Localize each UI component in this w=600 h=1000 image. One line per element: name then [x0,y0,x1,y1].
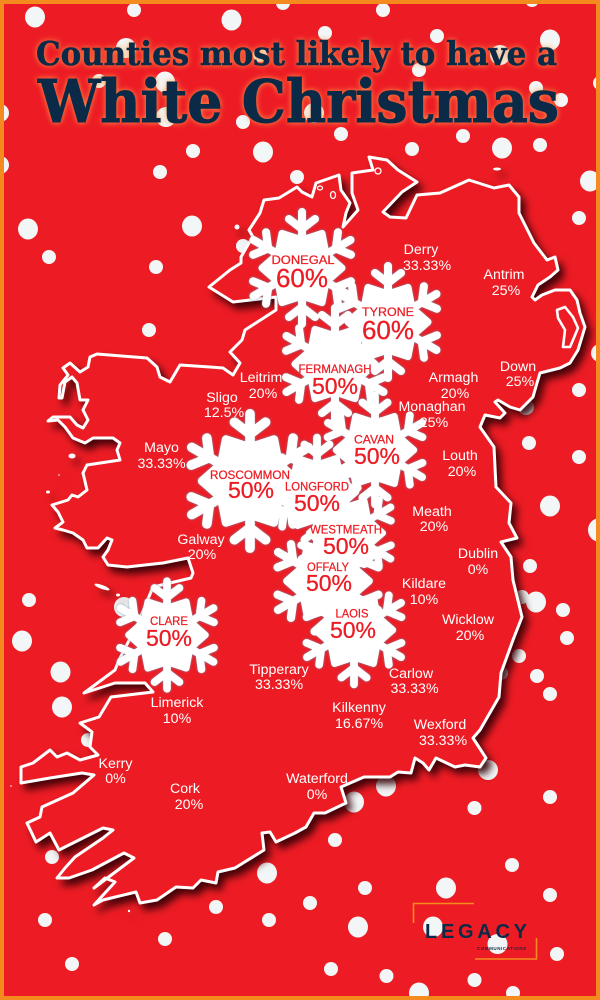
Tipperary: 33.33% [255,677,303,693]
Galway: Galway [177,532,225,548]
Offaly 50%: 50% [306,570,352,596]
snowflakes [114,212,443,689]
Tipperary: Tipperary [249,662,309,678]
Kilkenny: 16.67% [335,716,383,732]
Dublin: 0% [468,562,489,578]
Roscommon 50%: ROSCOMMON [210,468,290,482]
snowflake: Westmeath [295,481,397,585]
snowflake: Roscommon [184,414,316,548]
Kerry: 0% [105,771,126,787]
Armagh: 20% [441,386,470,402]
islands [10,168,501,912]
county percentage labels [99,242,536,813]
Mayo: Mayo [144,440,179,456]
Kilkenny: Kilkenny [332,700,386,716]
Carlow: Carlow [389,666,433,682]
Antrim: 25% [492,283,521,299]
snowflake: Longford [264,438,370,546]
Fermanagh 50%: FERMANAGH [298,362,372,376]
Kildare: Kildare [402,576,446,592]
Sligo: 12.5% [204,405,244,421]
Wicklow: 20% [456,628,485,644]
snowflake: Donegal [247,212,357,324]
Donegal 60% [272,253,335,293]
logo wordmark: LEGACY [425,921,528,943]
snowflake: Fermanagh [280,308,390,420]
Roscommon 50%: 50% [228,477,274,503]
Wexford: 33.33% [419,733,467,749]
Meath: Meath [412,504,452,520]
title line 1: Counties most likely to have a [36,34,557,73]
Strangford Lough [557,307,578,347]
Antrim: Antrim [484,267,524,283]
Tyrone 60%: 60% [362,315,414,345]
Limerick: 10% [163,711,192,727]
Cavan 50%: 50% [354,443,400,469]
map of Ireland [10,157,585,912]
Cork: Cork [170,781,200,797]
logo brackets [414,904,536,959]
Donegal 60%: 60% [276,263,328,293]
Longford 50%: LONGFORD [285,480,349,494]
Fermanagh 50% [298,362,372,399]
Derry: Derry [404,242,438,258]
Waterford: 0% [307,787,328,803]
Armagh: Armagh [429,370,478,386]
Tyrone 60%: TYRONE [362,305,414,319]
snowflake: Laois [301,576,407,684]
Longford 50% [285,480,349,516]
snowflake: Offaly [271,523,385,639]
Cavan 50%: CAVAN [354,432,394,446]
Longford 50%: 50% [294,490,340,516]
title [36,34,559,136]
Monaghan: 25% [420,415,449,431]
Westmeath 50%: 50% [323,533,369,559]
Meath: 20% [420,519,449,535]
Derry: 33.33% [403,258,451,274]
Galway: 20% [188,547,217,563]
Offaly 50%: OFFALY [307,560,349,574]
Leitrim: Leitrim [240,370,282,386]
Westmeath 50% [310,522,382,559]
Clare 50%: 50% [146,625,192,651]
Fermanagh 50%: 50% [312,373,358,399]
Donegal 60%: DONEGAL [272,253,335,267]
Roscommon 50% [210,468,290,503]
snowflake: Cavan [322,396,428,504]
Louth: 20% [448,464,477,480]
Down: Down [500,359,536,375]
Down: 25% [506,374,535,390]
Laois 50%: 50% [330,617,376,643]
Westmeath 50%: WESTMEATH [310,522,382,536]
snowflake labels [146,253,414,651]
Dublin: Dublin [458,546,498,562]
Mayo: 33.33% [137,456,186,472]
Laois 50%: LAOIS [336,606,368,620]
island outline [21,157,585,905]
Waterford: Waterford [286,771,348,787]
Cork: 20% [175,797,204,813]
Clare 50%: CLARE [150,614,188,628]
Wicklow: Wicklow [442,612,494,628]
Limerick: Limerick [151,695,203,711]
Monaghan: Monaghan [398,399,466,415]
Louth: Louth [442,448,478,464]
title line 2: White Christmas [37,67,559,136]
Wexford: Wexford [414,717,466,733]
Carlow: 33.33% [390,681,439,697]
snowflake: Tyrone [333,266,443,378]
Kildare: 10% [410,592,439,608]
logo subline: COMMUNICATIONS [477,946,526,951]
snowflake: Clare [114,581,220,689]
logo: Legacy Communications [414,904,536,959]
Leitrim: 20% [249,386,278,402]
Kerry: Kerry [99,756,132,772]
Sligo: Sligo [206,390,238,406]
